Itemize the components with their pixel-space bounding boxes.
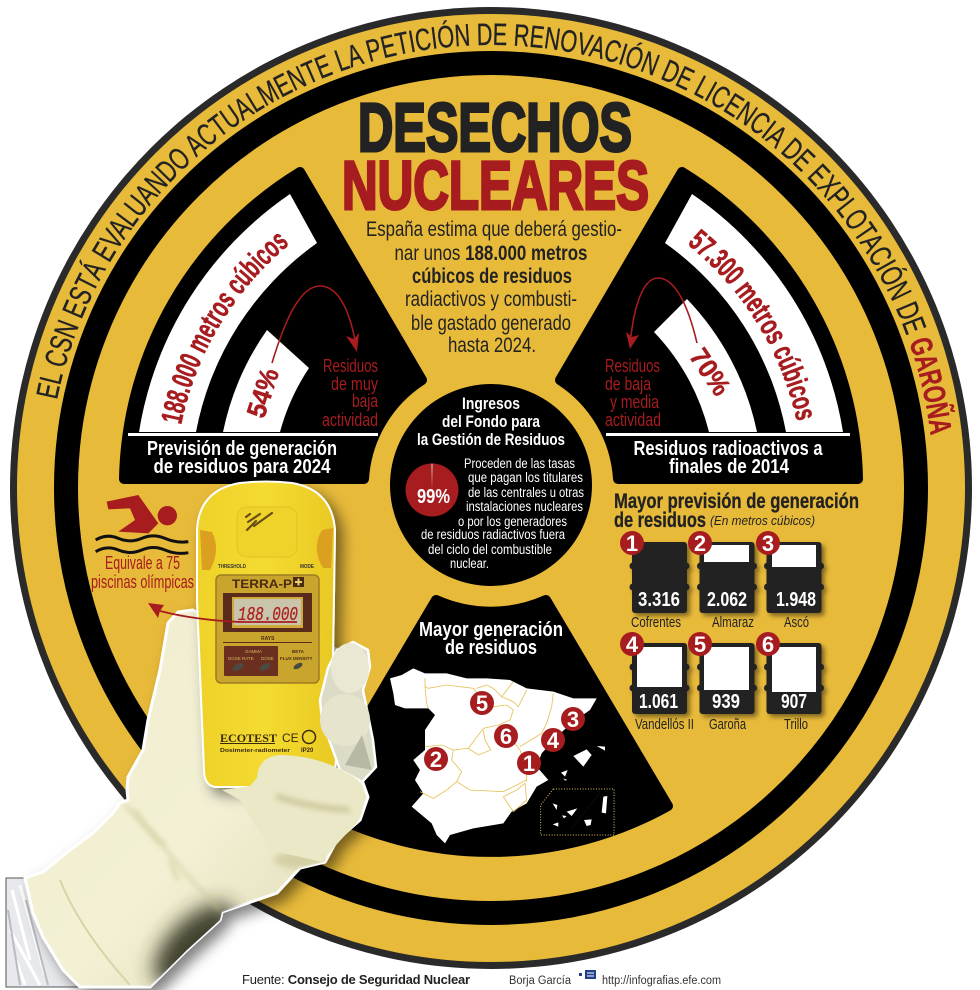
center body text: de las centrales u otras <box>468 485 584 500</box>
pie 99 percent: 99% <box>417 486 450 508</box>
map heading <box>419 619 563 659</box>
index finger front <box>222 755 364 862</box>
barrel 1 cofrentes: 1 <box>626 531 638 556</box>
gamma box <box>224 646 278 676</box>
center body text: de residuos radiactivos fuera <box>421 527 565 542</box>
panel caption: de residuos para 2024 <box>154 456 331 478</box>
device details: BETA <box>292 649 305 654</box>
map badges <box>424 691 585 776</box>
54 percent: 54% <box>241 365 285 421</box>
barrel 3 asco: 3 <box>762 531 774 556</box>
center body text: nuclear. <box>450 556 489 571</box>
barrels heading: de residuos <box>614 509 706 532</box>
footer source <box>242 970 721 987</box>
dosimeter device <box>197 482 336 787</box>
device details: DOSE RATE <box>228 656 254 661</box>
map heading: de residuos <box>445 637 537 659</box>
barrel 4 vandellos: Vandellós II <box>635 717 694 733</box>
center heading <box>417 394 565 449</box>
black ring <box>66 63 916 913</box>
swimmer callout <box>91 495 194 592</box>
arrow to residuos <box>626 278 697 349</box>
arc label 188.000: 188.000 metros cúbicos <box>162 234 288 424</box>
barrel 1 cofrentes: 3.316 <box>638 589 680 611</box>
map heading: Mayor generación <box>419 619 563 641</box>
balearic islands <box>561 746 605 781</box>
icon: swimmer <box>96 495 188 553</box>
display <box>223 593 312 632</box>
label residuos baja media <box>605 356 661 430</box>
label residuos muy baja <box>322 356 379 430</box>
barrel 6 trillo <box>756 632 824 733</box>
speaker panel <box>237 507 297 557</box>
white band inner <box>223 330 309 432</box>
panel: residuos 2014 <box>555 167 863 484</box>
panel caption <box>147 438 337 478</box>
barrels heading: (En metros cúbicos) <box>710 513 815 528</box>
white band outer <box>139 194 317 432</box>
intro text: hasta 2024. <box>448 334 536 357</box>
logo: ECOTEST <box>220 731 277 745</box>
side buttons <box>200 530 216 570</box>
device details: MODE <box>300 564 315 570</box>
label residuos baja media: y media <box>610 392 660 412</box>
barrel 2 almaraz: 2.062 <box>707 589 747 611</box>
map badges: 1 <box>523 751 535 776</box>
barrels heading <box>614 490 859 532</box>
center body text: instalaciones nucleares <box>466 499 583 514</box>
panel: mayor prevision barrels <box>614 490 859 733</box>
circular headline around dial: EL CSN ESTÁ EVALUANDO ACTUALMENTE LA PETICIÓN DE RENOVACIÓN DE LICENCIA DE EXPLOTACIÓN DE GAROÑA <box>36 20 956 436</box>
device details: RAYS <box>261 636 275 642</box>
panel caption <box>634 438 823 478</box>
device details: TERRA-P <box>232 577 292 591</box>
intro text: radiactivos y combusti- <box>405 288 577 311</box>
logo efe <box>579 970 596 979</box>
center body text <box>421 456 584 571</box>
barrel 6 trillo: 6 <box>762 632 774 657</box>
control panel <box>216 575 319 683</box>
panel caption: Residuos radioactivos a <box>634 438 823 460</box>
glove shading <box>60 805 326 990</box>
blade left <box>124 172 422 479</box>
author: Borja García <box>509 975 572 987</box>
title line: desechos: DESECHOS <box>358 89 632 166</box>
label residuos muy baja: actividad <box>322 410 378 430</box>
intro text: ble gastado generado <box>411 312 571 335</box>
upper fingers front <box>320 642 376 782</box>
label residuos baja media: Residuos <box>605 356 660 376</box>
center heading: Ingresos <box>462 394 520 413</box>
intro text <box>366 218 622 357</box>
small labels: THRESHOLD <box>218 564 246 570</box>
center heading: del Fondo para <box>442 412 540 431</box>
device details: GAMMA <box>245 649 262 654</box>
photo: gloved hand holding dosimeter <box>6 482 376 990</box>
arrow from display to swimmer <box>148 603 297 622</box>
device details <box>200 507 333 754</box>
swimmer caption: piscinas olímpicas <box>91 572 194 592</box>
barrel 1 cofrentes: Cofrentes <box>631 615 681 631</box>
white band inner <box>654 299 757 432</box>
intro text: España estima que deberá gestio- <box>366 218 622 241</box>
barrel 4 vandellos: 4 <box>626 632 639 657</box>
center body text: que pagan los titulares <box>468 470 583 485</box>
barrel 2 almaraz <box>688 531 757 631</box>
label residuos baja media: actividad <box>605 410 661 430</box>
barrel 1 cofrentes <box>620 531 690 631</box>
swimmer caption <box>91 553 194 592</box>
label residuos muy baja: baja <box>352 391 379 411</box>
center body text: o por los generadores <box>458 514 567 529</box>
label residuos muy baja: de muy <box>331 374 378 394</box>
map badges: 4 <box>547 728 560 753</box>
panel: mayor generacion map <box>314 600 668 852</box>
title line: nucleares: NUCLEARES <box>342 147 649 224</box>
canary islands box <box>541 789 614 835</box>
map badges: 3 <box>567 707 579 732</box>
map of Spain <box>390 668 614 843</box>
barrel 6 trillo: Trillo <box>784 717 808 733</box>
panel: ingresos fondo <box>390 384 592 586</box>
sleeve <box>6 878 90 987</box>
device details: IP20 <box>301 748 314 754</box>
glove back <box>25 610 368 987</box>
label residuos baja media: de baja <box>605 374 652 394</box>
barrel 5 garona <box>688 632 757 733</box>
blade bottom <box>314 600 668 852</box>
device details: DOSE <box>261 656 274 661</box>
70 percent: 70% <box>684 343 736 401</box>
pie 99 percent <box>406 464 458 516</box>
device details: FLUX DENSITY <box>280 656 313 661</box>
blade right <box>560 172 858 479</box>
title <box>342 89 649 224</box>
barrels heading: Mayor previsión de generación <box>614 490 859 513</box>
finger crease <box>276 796 350 810</box>
intro text: nar unos 188.000 metros <box>394 242 588 265</box>
barrel 3 asco: 1.948 <box>776 589 816 611</box>
map badges: 5 <box>476 691 488 716</box>
center heading: la Gestión de Residuos <box>417 430 565 449</box>
map badges: 2 <box>430 747 442 772</box>
map badges: 6 <box>500 724 512 749</box>
panel caption: finales de 2014 <box>669 456 790 478</box>
swimmer caption: Equivale a 75 <box>105 553 180 573</box>
barrel 5 garona: Garoña <box>709 717 747 733</box>
website: http://infografias.efe.com <box>602 975 721 987</box>
device details: 188.000 <box>238 604 298 626</box>
center body text: Proceden de las tasas <box>464 456 575 471</box>
barrel 5 garona: 5 <box>694 632 706 657</box>
barrel 2 almaraz: Almaraz <box>712 615 754 631</box>
barrel 3 asco <box>756 531 824 631</box>
barrel 2 almaraz: 2 <box>694 531 706 556</box>
panel caption: Previsión de generación <box>147 438 337 460</box>
panel: prevision 2024 <box>119 167 427 484</box>
intro text: cúbicos de residuos <box>412 265 572 288</box>
barrel 4 vandellos <box>620 632 694 733</box>
device details: Dosimeter-radiometer <box>220 748 291 754</box>
device details: CE <box>282 731 299 745</box>
barrel 3 asco: Ascó <box>784 615 809 631</box>
center circle <box>390 384 592 586</box>
arc label 57.300: 57.300 metros cúbicos <box>689 228 812 420</box>
white band outer <box>665 194 843 432</box>
source text: Fuente: Consejo de Seguridad Nuclear <box>242 972 470 987</box>
label residuos muy baja: Residuos <box>323 356 378 376</box>
arrow to residuos <box>272 286 359 363</box>
barrel 5 garona: 939 <box>712 691 740 713</box>
center body text: del ciclo del combustible <box>428 542 552 557</box>
barrel 4 vandellos: 1.061 <box>639 691 678 713</box>
barrel 6 trillo: 907 <box>781 691 807 713</box>
